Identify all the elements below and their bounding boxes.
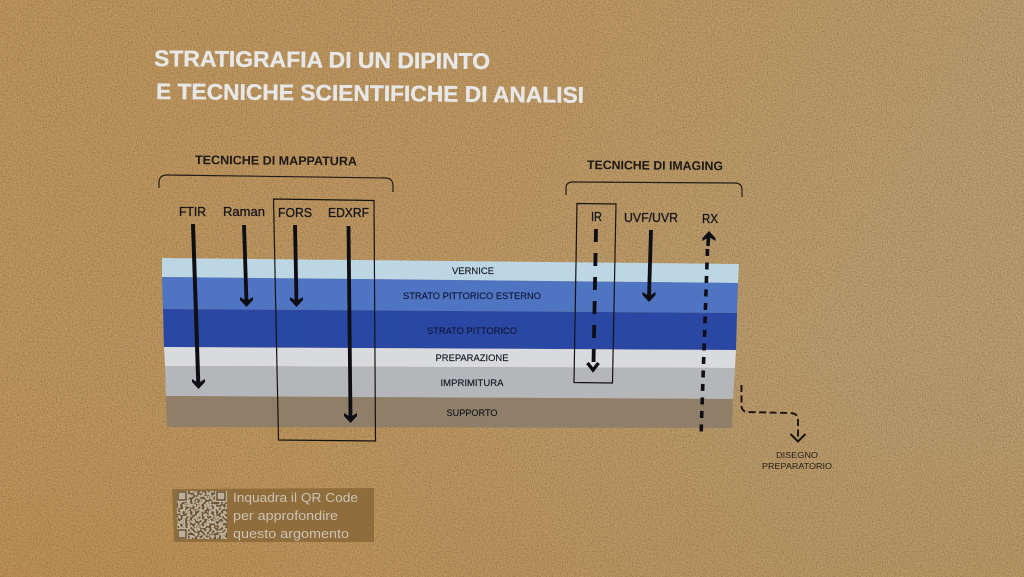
technique labels xyxy=(179,205,719,226)
technique labels: RX xyxy=(702,212,719,226)
layer: imprimitura xyxy=(165,366,735,399)
layer labels: STRATO PITTORICO ESTERNO xyxy=(403,291,541,302)
icon: QR code xyxy=(177,491,227,539)
QR callout xyxy=(172,488,374,542)
layer: strato pittorico xyxy=(163,309,737,350)
technique labels: UVF/UVR xyxy=(624,211,678,225)
callout text: questo argomento xyxy=(233,526,349,541)
arrow: disegno preparatorio dashed xyxy=(742,385,806,442)
label: disegno preparatorio: DISEGNO xyxy=(776,450,818,460)
technique labels: EDXRF xyxy=(328,206,369,220)
bracket: imaging xyxy=(566,182,742,197)
arrow: UVF/UVR xyxy=(642,230,656,302)
heading: tecniche di mappatura: TECNICHE DI MAPPATURA xyxy=(195,153,357,168)
arrow: FTIR xyxy=(192,224,205,389)
arrow: EDXRF xyxy=(344,226,357,423)
label: disegno preparatorio: PREPARATORIO xyxy=(762,461,832,471)
technique labels: Raman xyxy=(223,205,265,219)
arrow: RX dashed up xyxy=(701,231,716,436)
layer: supporto xyxy=(166,396,733,428)
title: E TECNICHE SCIENTIFICHE DI ANALISI xyxy=(156,79,584,108)
layer labels xyxy=(403,266,541,419)
box: FORS and EDXRF xyxy=(274,199,376,441)
heading: tecniche di imaging: TECNICHE DI IMAGING xyxy=(587,158,723,173)
layer: strato pittorico esterno xyxy=(162,277,738,313)
arrow: Raman xyxy=(240,225,253,307)
layer labels: PREPARAZIONE xyxy=(436,353,508,364)
box: IR xyxy=(574,204,616,383)
callout text xyxy=(233,490,358,541)
callout text: per approfondire xyxy=(233,508,338,523)
technique labels: FORS xyxy=(278,206,312,220)
layer: vernice xyxy=(162,258,739,283)
callout text: Inquadra il QR Code xyxy=(233,490,358,505)
layer labels: IMPRIMITURA xyxy=(440,378,504,389)
title: STRATIGRAFIA DI UN DIPINTO xyxy=(154,46,490,74)
technique labels: IR xyxy=(591,210,602,224)
label: disegno preparatorio xyxy=(762,450,832,471)
arrow: IR dashed xyxy=(588,229,598,370)
callout panel xyxy=(172,488,374,542)
layer labels: STRATO PITTORICO xyxy=(427,326,517,337)
layer labels: SUPPORTO xyxy=(446,408,498,419)
arrow: FORS xyxy=(290,225,303,307)
stratigraphy layers xyxy=(162,258,739,428)
bracket: mappatura xyxy=(159,175,393,192)
technique labels: FTIR xyxy=(179,205,206,219)
layer: preparazione xyxy=(164,347,736,368)
title xyxy=(154,46,584,108)
layer labels: VERNICE xyxy=(452,266,494,277)
